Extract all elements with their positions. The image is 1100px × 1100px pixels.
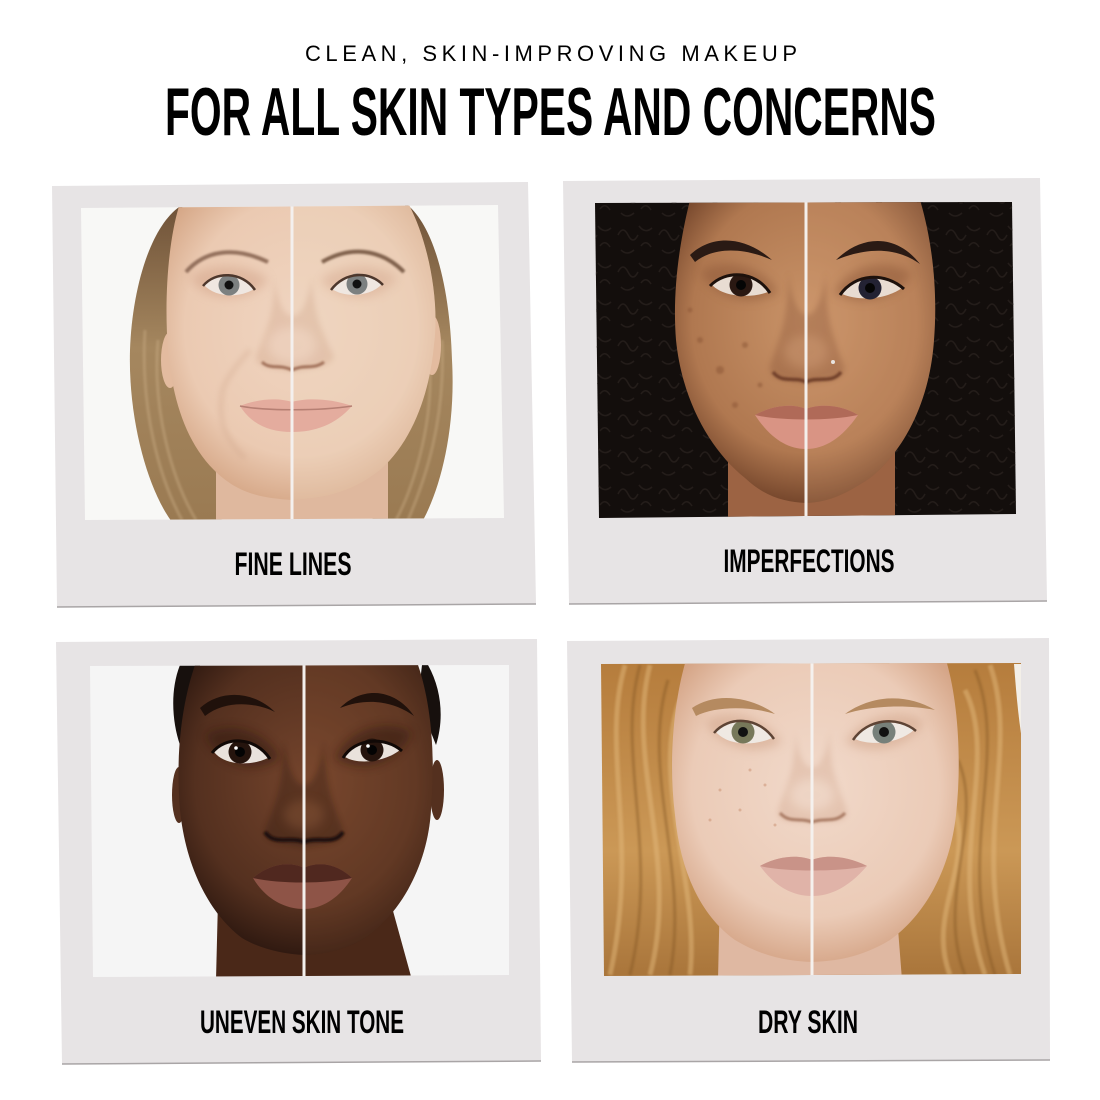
panel: uneven skin tone — [56, 639, 541, 1064]
panel: imperfections — [563, 178, 1047, 604]
icon: ears — [172, 760, 444, 823]
eyebrow heading: CLEAN, SKIN-IMPROVING MAKEUP — [305, 41, 797, 66]
label: fine lines: FINE LINES — [234, 546, 352, 582]
label: imperfections: IMPERFECTIONS — [724, 543, 894, 579]
panel: fine lines — [52, 182, 536, 607]
icon: ears — [161, 315, 441, 388]
photo: uneven skin tone face — [85, 660, 515, 980]
photo: fine lines face — [70, 200, 510, 525]
label: uneven skin tone: UNEVEN SKIN TONE — [200, 1004, 404, 1040]
label: dry skin: DRY SKIN — [758, 1004, 858, 1040]
photo: dry skin face — [596, 658, 1026, 980]
photo: imperfections face — [590, 198, 1020, 523]
panel: dry skin — [567, 638, 1050, 1062]
